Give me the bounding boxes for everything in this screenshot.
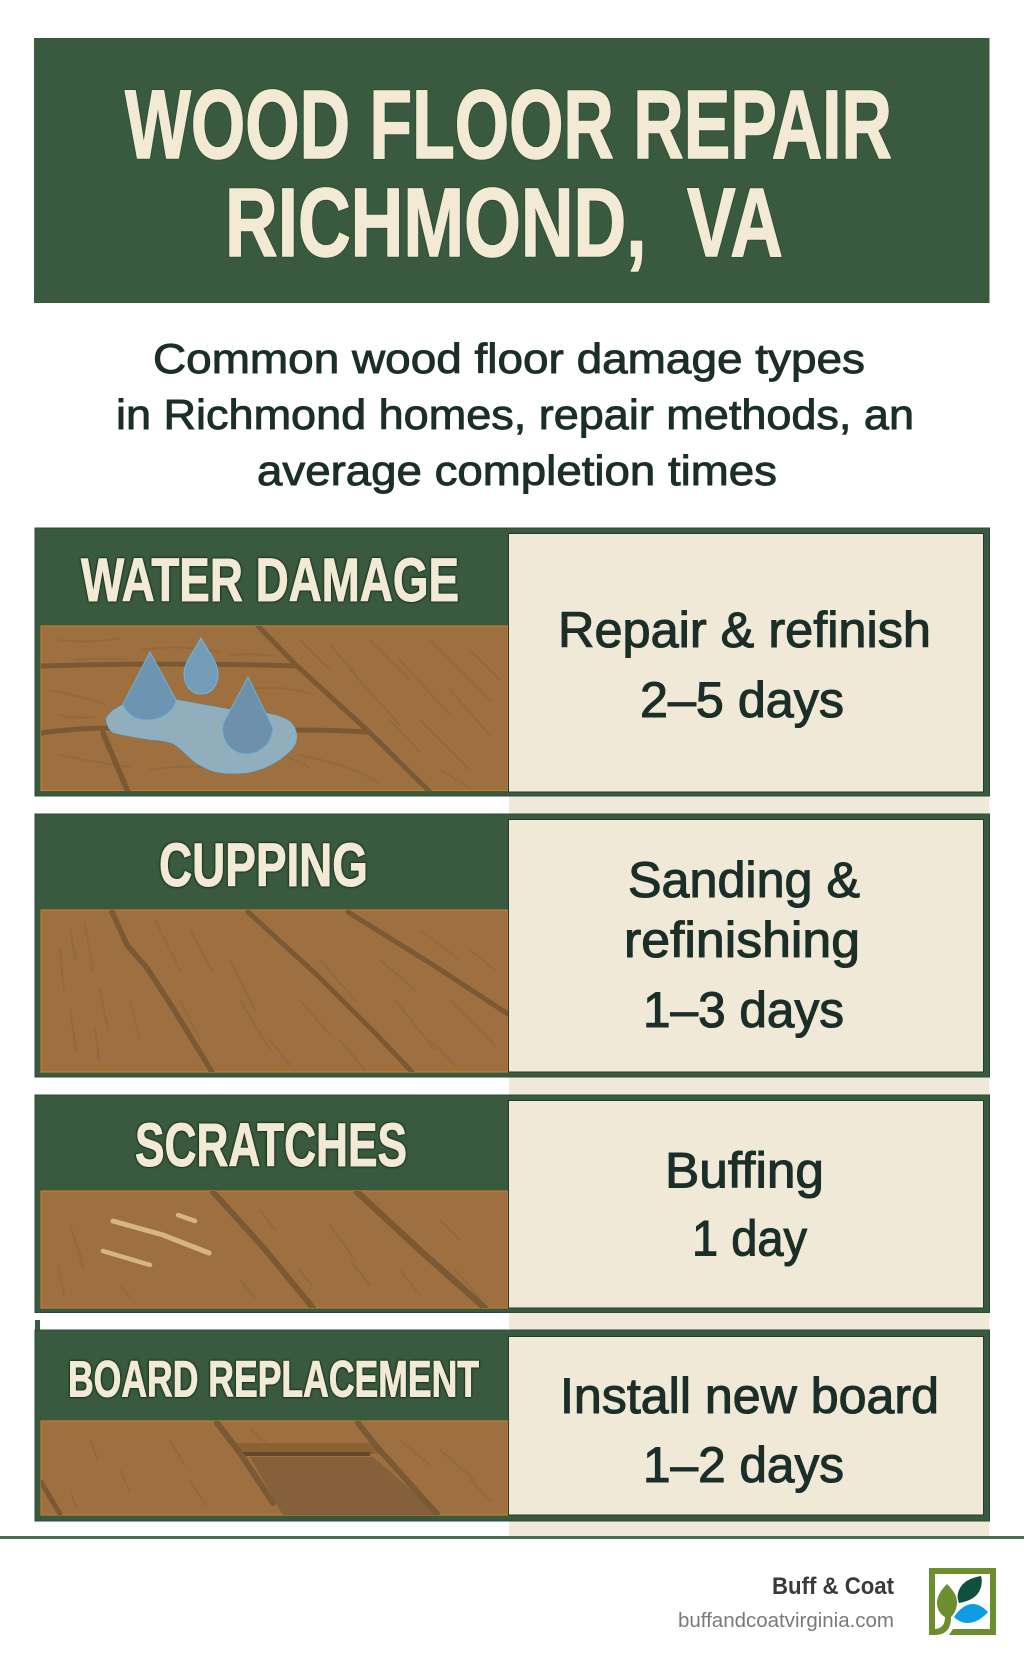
repair info: water damage: 2–5 days xyxy=(640,672,844,728)
title banner xyxy=(34,38,990,303)
repair info: water damage: Repair & refinish xyxy=(558,602,931,658)
panel: board replacement xyxy=(35,1330,990,1521)
stray edge tick xyxy=(35,1320,40,1330)
repair info: board replacement: Install new board xyxy=(560,1368,939,1424)
subtitle text: average completion times xyxy=(257,447,777,494)
repair info: scratches xyxy=(508,1100,984,1308)
title banner: RICHMOND, VA xyxy=(225,168,783,277)
subtitle text: Common wood floor damage types xyxy=(153,335,865,382)
logo icon xyxy=(929,1568,996,1635)
repair info: water damage xyxy=(508,534,984,792)
wood floor illustration: cupping xyxy=(41,910,508,1072)
heading: cupping: CUPPING xyxy=(159,831,368,899)
water drop top xyxy=(184,638,218,694)
panel: scratches xyxy=(35,1095,990,1312)
panel: cupping xyxy=(35,814,990,1077)
cream shadow strips behind panels xyxy=(509,796,990,1536)
footer divider xyxy=(0,1536,1024,1539)
heading: board replacement: BOARD REPLACEMENT xyxy=(68,1350,479,1408)
missing board recess xyxy=(250,1457,440,1515)
repair info: scratches: Buffing xyxy=(665,1142,824,1198)
repair info: cupping: refinishing xyxy=(624,912,860,968)
subtitle text xyxy=(116,335,914,494)
panel: water damage xyxy=(35,528,990,796)
wood floor illustration: scratches xyxy=(41,1191,508,1308)
repair info: board replacement: 1–2 days xyxy=(643,1437,844,1493)
repair info: board replacement xyxy=(508,1336,984,1515)
subtitle text: in Richmond homes, repair methods, an xyxy=(116,391,914,438)
footer brand text: buffandcoatvirginia.com xyxy=(678,1610,894,1632)
footer brand text xyxy=(678,1573,894,1632)
water drop right xyxy=(223,677,273,754)
heading: water damage: WATER DAMAGE xyxy=(81,546,459,614)
wood floor illustration: missing board xyxy=(41,1421,508,1515)
water drop left xyxy=(123,652,176,720)
repair info: cupping: Sanding & xyxy=(628,852,860,908)
heading: scratches: SCRATCHES xyxy=(135,1111,407,1179)
wood floor illustration with water xyxy=(41,626,508,792)
repair info: scratches: 1 day xyxy=(692,1210,807,1266)
water puddle xyxy=(107,700,296,773)
repair info: cupping: 1–3 days xyxy=(643,982,844,1038)
repair info: cupping xyxy=(508,820,984,1072)
footer brand text: Buff & Coat xyxy=(772,1573,894,1600)
scratch marks xyxy=(103,1215,209,1265)
